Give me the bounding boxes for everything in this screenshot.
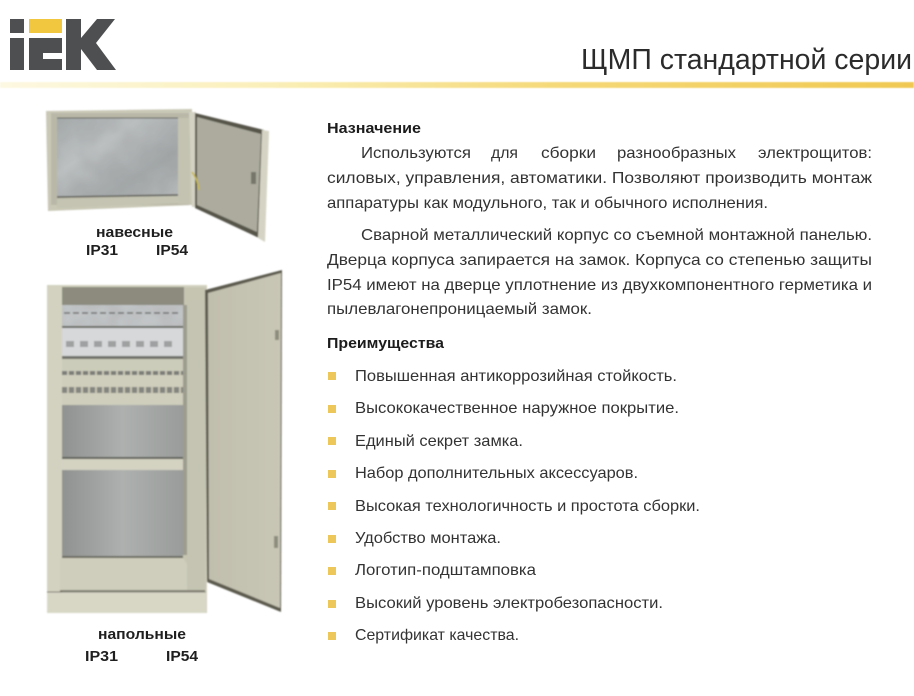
paragraph: usage: электрощитов:: [758, 145, 872, 162]
photo: floor-standing cabinet: [47, 270, 282, 613]
title: ЩМП стандартной серии: [581, 44, 912, 76]
paragraph: usage: силовых, управления, автоматики. Позволяют производить монтаж: [327, 170, 872, 187]
paragraph: usage: аппаратуры как модульного, так и обычного исполнения.: [327, 195, 768, 212]
list: advantages: Высококачественное наружное покрытие.: [355, 400, 679, 417]
paragraph: construction: пылевлагонепроницаемый замок.: [327, 301, 592, 318]
label: wall-mounted: [86, 224, 189, 259]
list: advantages: Единый секрет замка.: [355, 433, 523, 450]
label: wall-mounted: IP54: [156, 242, 189, 259]
paragraph: usage: [327, 145, 872, 212]
list: advantages: Сертификат качества.: [355, 627, 519, 644]
photo: wall-mounted cabinet: [46, 109, 269, 242]
list: advantages: Высокая технологичность и простота сборки.: [355, 498, 700, 515]
label: floor-standing: IP54: [166, 648, 199, 665]
header divider bar: [0, 82, 914, 88]
paragraph: usage: сборки: [541, 145, 596, 162]
label: wall-mounted: IP31: [86, 242, 118, 259]
list: advantages: Набор дополнительных аксессуаров.: [355, 465, 638, 482]
paragraph: construction: Дверца корпуса запирается на замок. Корпуса со степенью защиты: [327, 252, 872, 269]
paragraph: usage: для: [491, 145, 518, 162]
paragraph: usage: Используются: [361, 145, 471, 162]
label: wall-mounted: навесные: [96, 224, 173, 241]
label: floor-standing: IP31: [85, 648, 118, 665]
label: floor-standing: напольные: [98, 626, 186, 643]
paragraph: construction: Сварной металлический корпус со съемной монтажной панелью.: [361, 227, 872, 244]
list: advantages: [328, 368, 700, 644]
label: floor-standing: [85, 626, 199, 665]
paragraph: usage: разнообразных: [617, 145, 736, 162]
list: advantages: Удобство монтажа.: [355, 530, 501, 547]
heading: purpose: Назначение: [327, 120, 421, 137]
paragraph: construction: IP54 имеют на дверце уплотнение из двухкомпонентного герметика и: [327, 277, 872, 294]
list: advantages: Логотип-подштамповка: [355, 562, 536, 579]
paragraph: construction: [327, 227, 872, 318]
list: advantages: Высокий уровень электробезопасности.: [355, 595, 663, 612]
logo: IEK: [10, 19, 116, 70]
list: advantages: Повышенная антикоррозийная стойкость.: [355, 368, 677, 385]
heading: advantages: Преимущества: [327, 335, 445, 352]
